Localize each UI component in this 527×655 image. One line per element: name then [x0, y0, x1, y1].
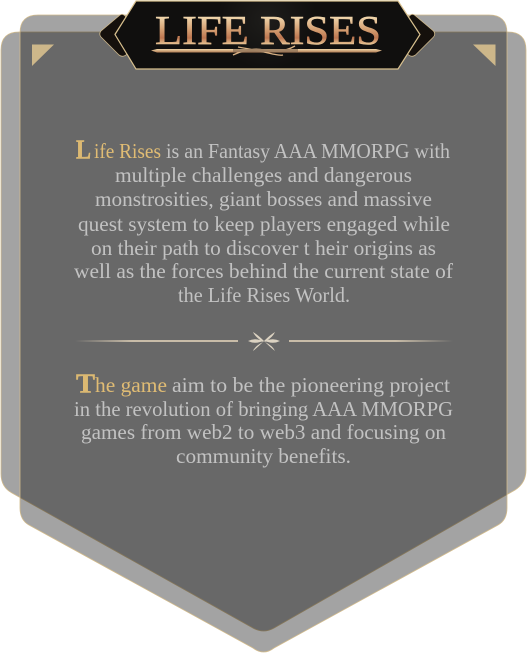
text block: intro paragraph [74, 134, 454, 307]
highlighted phrase: he game [95, 373, 167, 397]
text block: game paragraph [74, 368, 453, 468]
line 2: multiple challenges and dangerous [115, 163, 412, 187]
title text: LIFE RISES [155, 7, 381, 53]
icon: sword under title [151, 46, 382, 55]
title banner [100, 1, 435, 69]
divider with ornament [75, 332, 453, 351]
drop cap L: L [76, 134, 91, 164]
line 7: the Life Rises World. [178, 283, 350, 307]
line 4: quest system to keep players engaged while [78, 212, 450, 236]
line 5: on their path to discover t heir origins as [91, 236, 436, 260]
icon: top-right corner triangle [473, 44, 496, 66]
line 3: games from web2 to web3 and focusing on [81, 420, 446, 444]
line 6: well as the forces behind the current state of [74, 259, 454, 283]
icon: top-left corner triangle [32, 44, 54, 66]
icon: right chevron [408, 14, 435, 56]
line 4: community benefits. [176, 444, 351, 468]
line 3: monstrosities, giant bosses and massive [95, 187, 432, 211]
line 1: is an Fantasy AAA MMORPG with [166, 139, 450, 163]
line 2: in the revolution of bringing AAA MMORPG [74, 397, 453, 421]
highlighted product name: ife Rises [94, 139, 161, 163]
drop cap T: T [76, 368, 95, 398]
banner plate [115, 1, 420, 69]
line 1: aim to be the pioneering project [172, 373, 450, 397]
icon: ornament [248, 332, 280, 351]
icon: left chevron [100, 14, 127, 56]
